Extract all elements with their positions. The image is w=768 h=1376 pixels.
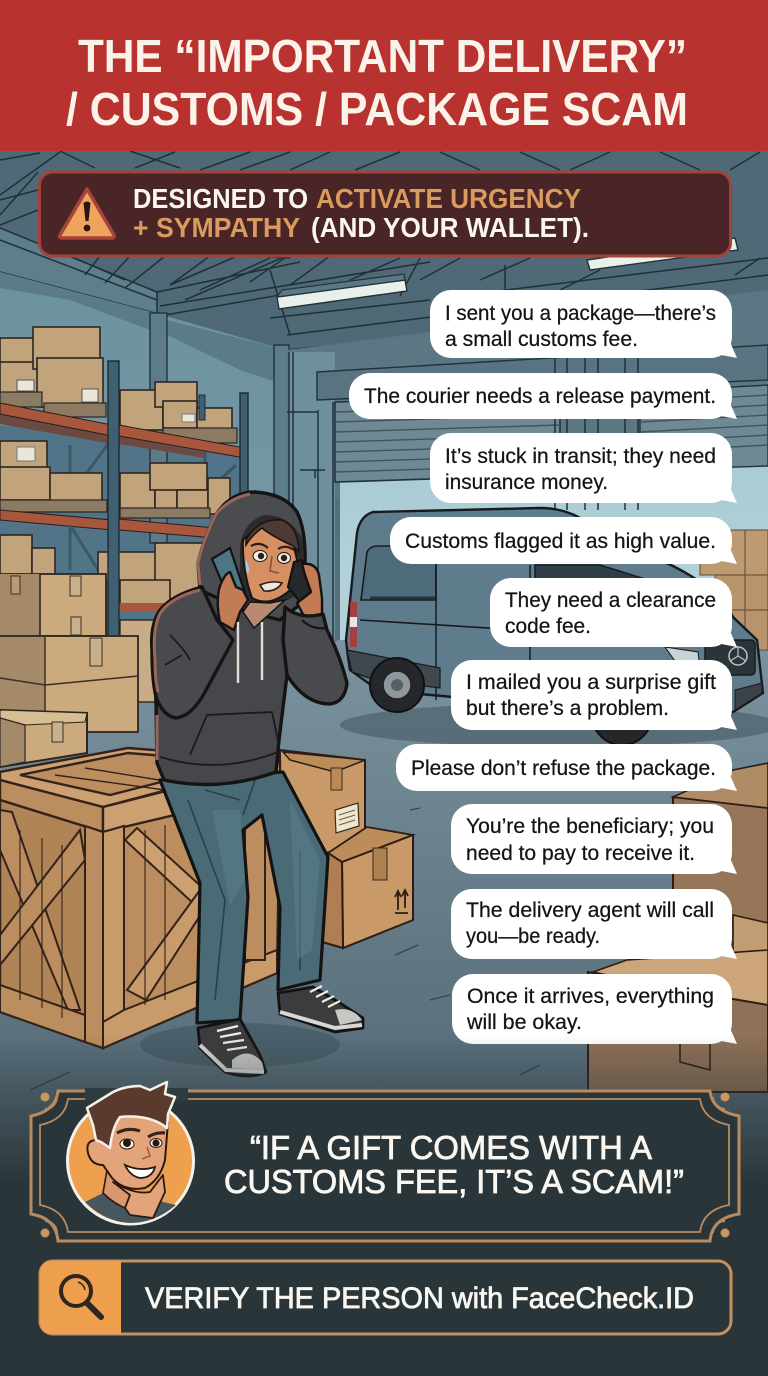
bubble 4	[390, 517, 737, 564]
back wall	[287, 290, 768, 500]
warehouse shelving with boxes	[0, 327, 248, 641]
hands	[218, 564, 322, 630]
person shadow	[140, 1023, 340, 1067]
bubble 5: They need a clearance	[505, 589, 716, 612]
bubble 9: The delivery agent will call	[466, 899, 714, 922]
verify bar	[40, 1261, 731, 1334]
icon: magnifying glass	[40, 1261, 121, 1334]
ceiling light left	[277, 274, 407, 309]
wooden crate	[0, 748, 280, 1048]
left wall	[0, 272, 285, 700]
bubble 4: Customs flagged it as high value.	[405, 530, 716, 553]
floor	[0, 640, 768, 1262]
quote panel	[31, 1082, 739, 1241]
bubble 10	[452, 974, 737, 1044]
lower shelf strip	[105, 603, 165, 612]
crate right face bracing	[103, 800, 277, 1048]
delivery van	[340, 508, 768, 747]
third tier boxes	[0, 535, 203, 608]
rear wheel	[370, 658, 424, 712]
left sleeve	[152, 587, 233, 718]
quote panel: “IF A GIFT COMES WITH A	[250, 1129, 652, 1166]
top tier boxes	[0, 327, 237, 443]
hoodie strings	[238, 622, 262, 683]
right shoe	[278, 986, 363, 1032]
warning banner: + SYMPATHY	[133, 212, 300, 243]
shelf uprights	[108, 361, 119, 641]
upper beam	[0, 414, 112, 444]
bubble 8: need to pay to receive it.	[466, 842, 695, 865]
bubble 5: code fee.	[505, 615, 591, 638]
warning banner: (AND YOUR WALLET).	[311, 212, 589, 243]
shelf back wall	[0, 425, 240, 640]
bubble 10: Once it arrives, everything	[467, 985, 714, 1008]
stacked cardboard boxes left	[0, 574, 155, 767]
title banner	[0, 0, 768, 151]
bubble 6: but there’s a problem.	[466, 697, 669, 720]
roller door	[317, 345, 768, 510]
face	[243, 520, 299, 602]
avatar: smiling man	[68, 1082, 194, 1224]
bubble 2: The courier needs a release payment.	[364, 385, 716, 408]
second tier boxes	[0, 441, 236, 518]
verify bar: VERIFY THE PERSON with FaceCheck.ID	[145, 1282, 694, 1315]
hoodie body	[152, 590, 290, 784]
left shoe	[198, 1019, 266, 1076]
jeans	[160, 772, 328, 1023]
bubble 5	[490, 578, 737, 647]
dark footer background	[0, 1035, 768, 1376]
outside view	[340, 466, 768, 650]
title banner: / CUSTOMS / PACKAGE SCAM	[66, 83, 688, 135]
bubble 1: a small customs fee.	[445, 328, 638, 351]
bubble 9: you—be ready.	[466, 925, 600, 948]
bubble 3: insurance money.	[445, 471, 608, 494]
warning banner	[40, 172, 730, 256]
lower beam	[0, 510, 112, 530]
quote panel: CUSTOMS FEE, IT’S A SCAM!”	[224, 1163, 684, 1200]
warning banner: DESIGNED TO	[133, 183, 308, 214]
bubble 9	[451, 889, 737, 959]
crate left face bracing	[0, 810, 103, 1048]
ceiling	[0, 151, 768, 350]
bubble 8	[451, 804, 737, 874]
boxes right foreground	[588, 763, 768, 1092]
bubble 7: Please don’t refuse the package.	[411, 757, 716, 780]
bubble 7	[396, 744, 737, 791]
bubble 6: I mailed you a surprise gift	[466, 671, 716, 694]
phones	[212, 548, 313, 606]
panicked person on two phones	[152, 492, 363, 1076]
bubble 2	[349, 373, 737, 419]
wall column	[150, 313, 167, 543]
warning banner: ACTIVATE URGENCY	[316, 183, 581, 214]
title banner: THE “IMPORTANT DELIVERY”	[78, 30, 687, 82]
front wheel	[592, 685, 652, 745]
hood	[198, 492, 306, 620]
bubble 8: You’re the beneficiary; you	[466, 815, 714, 838]
bubble 1	[430, 290, 737, 358]
headlight and grille	[665, 640, 762, 710]
bubble 10: will be okay.	[466, 1011, 582, 1034]
bubble 3	[430, 433, 737, 503]
neck collar	[243, 600, 285, 628]
icon: warning triangle	[60, 189, 114, 238]
bubble 6	[451, 660, 737, 730]
background boxes outside door	[700, 530, 768, 650]
bubble 3: It’s stuck in transit; they need	[445, 445, 716, 468]
right sleeve	[283, 607, 347, 704]
cardboard boxes behind person	[280, 750, 413, 948]
ceiling light right	[587, 238, 738, 270]
bubble 1: I sent you a package—there’s	[445, 302, 716, 325]
